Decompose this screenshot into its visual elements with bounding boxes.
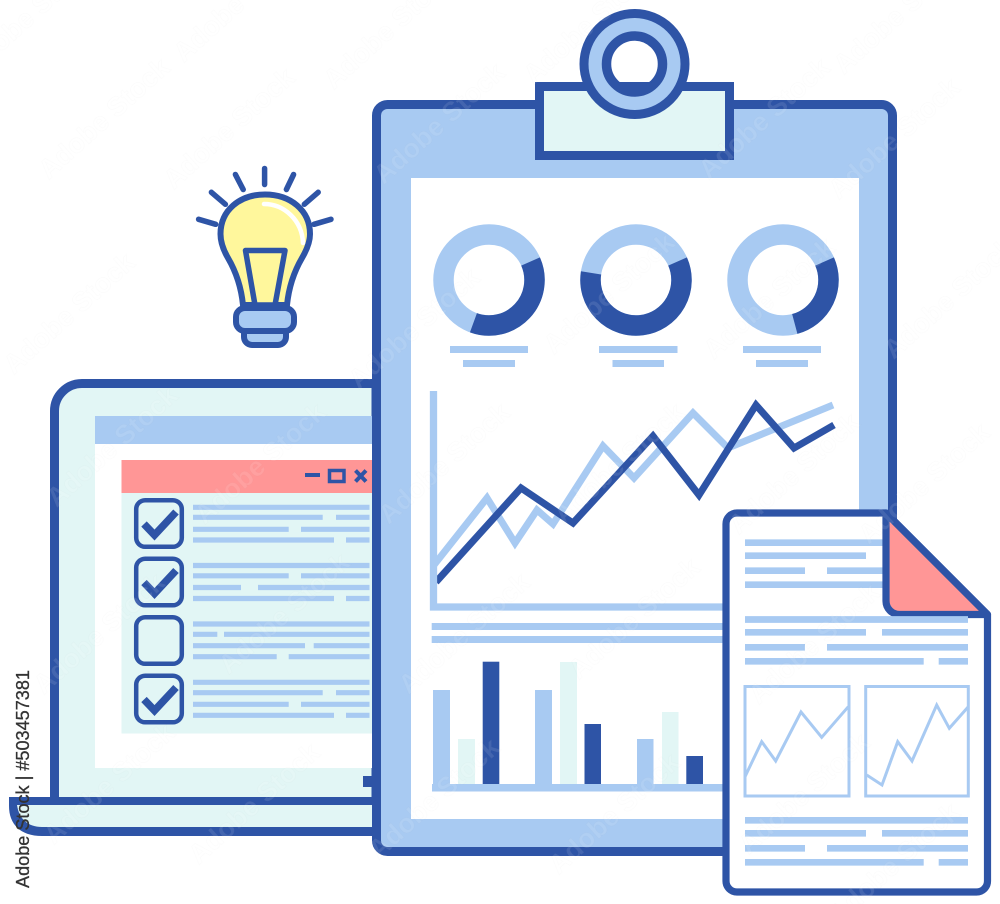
light bulb (199, 168, 331, 345)
document folded corner (886, 513, 988, 614)
dark series (436, 405, 834, 582)
divider lines (432, 623, 730, 643)
document sheet (726, 513, 988, 892)
window controls (305, 470, 366, 482)
watermark pattern: Adobe Stock (823, 71, 966, 205)
watermark pattern: Adobe Stock (543, 746, 686, 880)
watermark pattern: Adobe Stock (743, 576, 886, 710)
watermark pattern: Adobe Stock (363, 731, 506, 865)
mini chart 1 (745, 686, 849, 796)
bar chart (432, 662, 730, 792)
watermark pattern: Adobe Stock (213, 546, 356, 680)
chart axes (434, 391, 730, 607)
window title bar (122, 460, 374, 493)
clipboard (376, 14, 892, 852)
checklist window (122, 460, 374, 734)
donut chart 3 (738, 234, 829, 326)
watermark pattern: Adobe Stock (548, 396, 691, 530)
line chart (434, 391, 834, 607)
watermark pattern: Adobe Stock (393, 566, 536, 700)
donut 3 caption (743, 346, 821, 367)
watermark pattern: Adobe Stock (189, 396, 332, 530)
watermark pattern: Adobe Stock (733, 726, 876, 860)
laptop (9, 384, 376, 836)
watermark pattern: Adobe Stock (183, 736, 326, 870)
watermark pattern: Adobe Stock (373, 396, 516, 530)
bulb rays (199, 168, 331, 224)
clipboard board (376, 104, 892, 852)
checkbox 3 empty (136, 617, 182, 664)
watermark pattern: Adobe Stock (698, 231, 841, 365)
watermark pattern: Adobe Stock (368, 56, 511, 190)
stock id caption: Adobe Stock | #503457381 (13, 670, 33, 888)
donut chart 1 (444, 234, 535, 326)
checklist text lines (193, 507, 370, 715)
donut 1 caption (450, 346, 528, 367)
clip plate (540, 86, 730, 156)
bulb glass (220, 194, 310, 305)
light series (434, 405, 833, 565)
laptop base (9, 797, 376, 836)
checkbox 2 checked (136, 559, 182, 605)
document text middle (745, 620, 968, 661)
watermark pattern: Adobe Stock (693, 51, 836, 185)
watermark pattern: Adobe Stock (343, 261, 486, 395)
watermark pattern: Adobe Stock (538, 226, 681, 360)
donut 2 caption (599, 346, 678, 367)
watermark pattern: Adobe Stock (33, 51, 176, 185)
watermark pattern: Adobe Stock (563, 551, 706, 685)
document text bottom (745, 820, 968, 862)
checkbox 4 checked (136, 676, 182, 722)
bulb upper cap (236, 308, 294, 331)
watermark pattern: Adobe Stock (853, 416, 996, 550)
laptop screen (95, 416, 374, 768)
watermark pattern: Adobe Stock (28, 566, 171, 700)
watermark pattern: Adobe Stock (41, 379, 184, 513)
document text top (745, 543, 883, 585)
watermark pattern: Adobe Stock (0, 246, 141, 380)
laptop notch (363, 776, 375, 787)
watermark pattern: Adobe Stock (723, 406, 866, 540)
mini chart 2 (866, 686, 968, 796)
document (726, 513, 988, 892)
checkbox 1 checked (136, 500, 182, 547)
window body (122, 493, 374, 734)
bulb highlight (264, 204, 303, 243)
clipboard paper (411, 178, 859, 819)
laptop lid (54, 384, 376, 802)
bulb lower cap (244, 328, 286, 345)
clip ring (584, 14, 685, 114)
watermark pattern: Adobe Stock (158, 61, 301, 195)
donut chart 2 (590, 234, 682, 326)
bulb filament (246, 250, 285, 305)
watermark pattern: Adobe Stock (38, 716, 181, 850)
